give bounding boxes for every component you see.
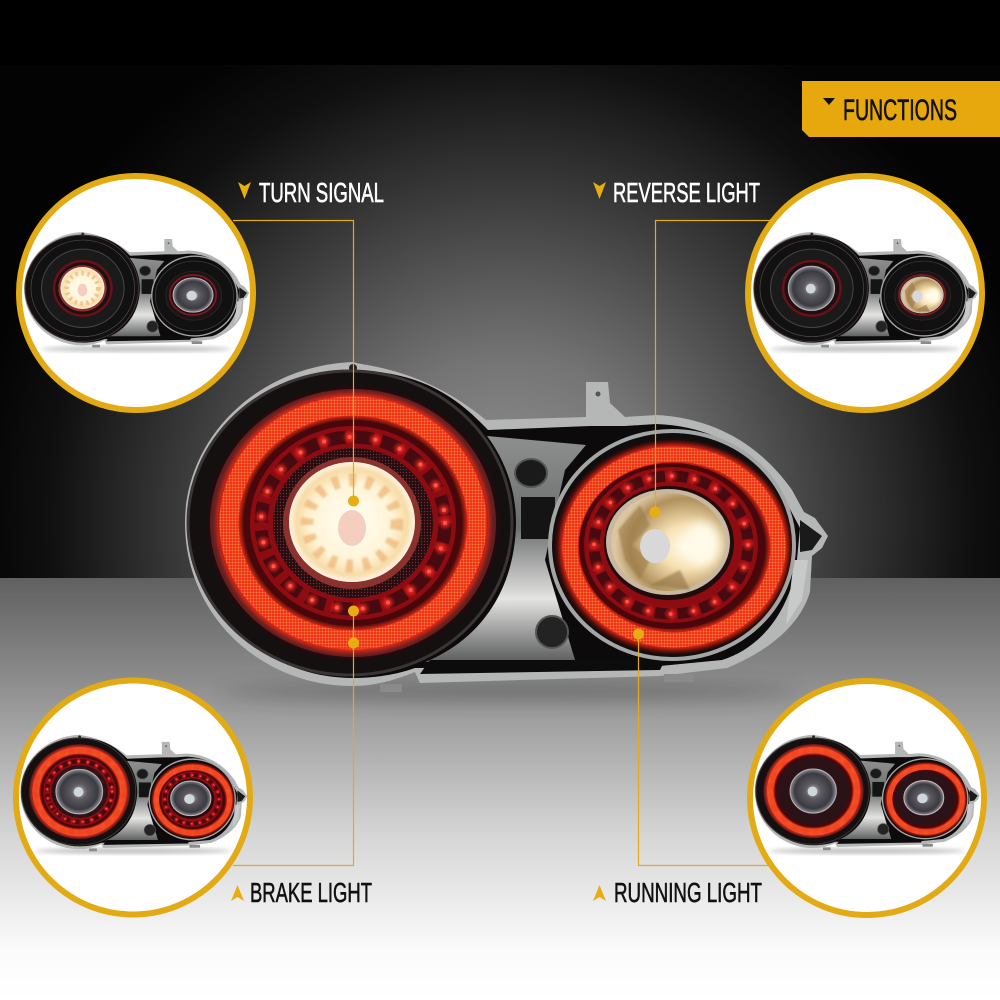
connector line: running light (638, 634, 770, 866)
banner triangle (823, 98, 835, 105)
callout circle: turn signal (19, 176, 253, 410)
label: running light: RUNNING LIGHT (614, 877, 762, 908)
main tail light (185, 362, 828, 700)
label: brake light (231, 877, 372, 908)
functions banner (802, 81, 1000, 137)
connector line: reverse light (656, 220, 770, 512)
connector line: turn signal (233, 220, 354, 500)
connector line: brake light (233, 611, 354, 866)
wall spotlight gradient (0, 65, 1000, 579)
callout circle: reverse light (748, 176, 982, 410)
marker dots (348, 496, 660, 648)
label: turn signal (238, 177, 384, 208)
label: reverse light: REVERSE LIGHT (613, 177, 760, 208)
label: turn signal: TURN SIGNAL (259, 177, 384, 208)
callout circle: brake light (16, 680, 250, 914)
label: reverse light (593, 177, 760, 208)
callout circle: running light (750, 681, 984, 915)
label: brake light: BRAKE LIGHT (250, 877, 372, 908)
reflective floor (0, 578, 1000, 1000)
label: running light (593, 877, 762, 908)
